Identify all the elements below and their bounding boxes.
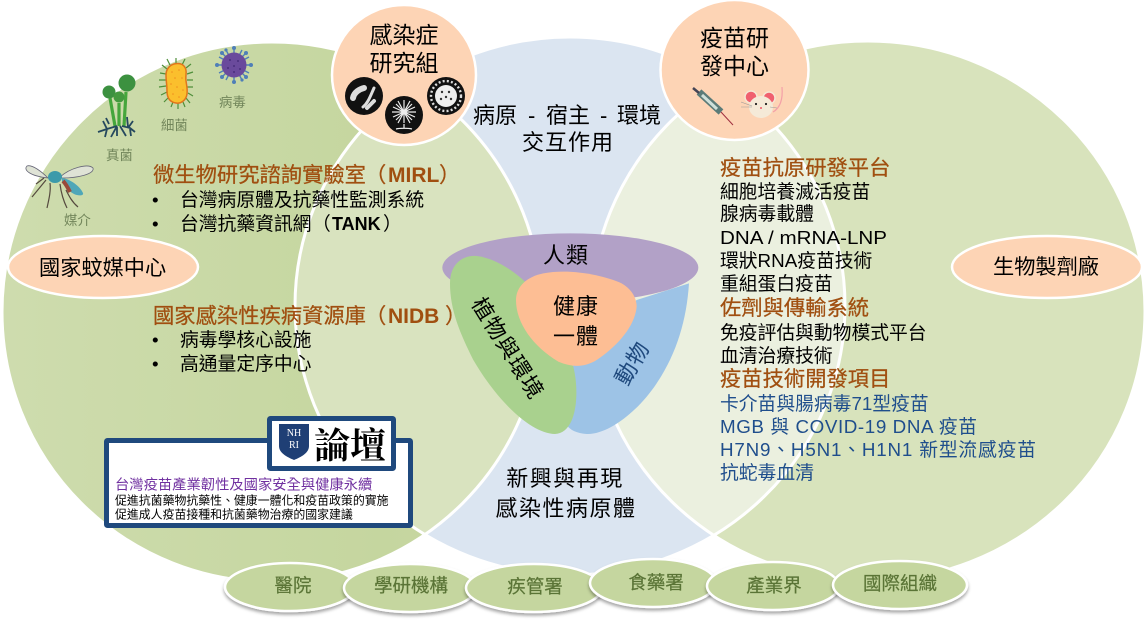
pill: CDC: 疾管署 <box>507 576 563 597</box>
list: adjuvants: 免疫評估與動物模式平台 <box>720 322 927 343</box>
pill: FDA: 食藥署 <box>628 572 684 593</box>
text block: vaccine platforms <box>720 156 1036 483</box>
text: pathogen host environment: 環境 <box>617 103 661 128</box>
list: adjuvants: 血清治療技術 <box>720 345 833 366</box>
logo: NHRI forum <box>270 418 394 468</box>
list: adjuvants <box>720 322 927 366</box>
badge: infectious disease research group: 感染症 <box>370 22 438 48</box>
overlap: center and right <box>604 117 844 534</box>
diagram: One Health <box>442 233 698 434</box>
text: pathogen host environment: - <box>600 103 607 128</box>
text: emerging pathogens: 新興與再現 <box>506 466 624 491</box>
list: antigen platforms: 腺病毒載體 <box>720 203 814 224</box>
logo: NHRI forum: RI <box>289 440 299 451</box>
bullet: Taiwan pathogen surveillance: • <box>152 189 159 210</box>
list: vaccine projects: 抗蛇毒血清 <box>720 462 814 483</box>
badge: infectious disease research group <box>332 5 476 145</box>
icon: syringe <box>693 88 733 125</box>
text: pathogen host environment: 交互作用 <box>522 130 614 155</box>
label: humans: 人類 <box>543 243 589 268</box>
icon: mouse <box>741 87 782 118</box>
overlap: left and center <box>296 120 530 533</box>
text: pathogen host environment: - <box>528 103 535 128</box>
pill: international organizations <box>833 561 967 609</box>
list: antigen platforms: DNA / mRNA-LNP <box>720 227 887 248</box>
icon: virus <box>215 46 253 84</box>
heading: adjuvants: 佐劑與傳輸系統 <box>720 296 869 320</box>
icon: fungus <box>98 74 136 137</box>
bullet: sequencing center: • <box>152 353 159 374</box>
bullet: TANK: ） <box>383 213 402 234</box>
list: vaccine projects: H7N9、H5N1、H1N1 新型流感疫苗 <box>720 439 1036 460</box>
pill: hospitals: 醫院 <box>274 575 312 596</box>
list: antigen platforms: 環狀RNA疫苗技術 <box>720 250 873 271</box>
bullet: TANK: 台灣抗藥資訊網 <box>180 213 311 234</box>
bullet: Taiwan pathogen surveillance: 台灣病原體及抗藥性監測系統 <box>180 189 424 210</box>
heading: MIRL: （ <box>365 163 386 187</box>
list: antigen platforms: 細胞培養滅活疫苗 <box>720 181 870 202</box>
list: vaccine projects <box>720 393 1036 483</box>
text block: MIRL <box>152 163 460 234</box>
pill: industry <box>707 562 839 610</box>
bullet: TANK: （ <box>312 213 331 234</box>
list: antigen platforms <box>720 181 887 294</box>
pill: academia <box>344 564 476 612</box>
heading: MIRL: 微生物研究諮詢實驗室 <box>153 163 366 187</box>
text: emerging pathogens <box>495 466 637 521</box>
logo: NHRI forum: 論壇 <box>314 426 386 466</box>
icon: fungus spore <box>385 96 423 134</box>
heading: vaccine projects: 疫苗技術開發項目 <box>720 367 890 391</box>
label: animals: 動物 <box>610 337 655 389</box>
heading: antigen platform: 疫苗抗原研發平台 <box>720 156 890 180</box>
segment: humans <box>442 233 698 302</box>
label: one health: 健康 <box>553 294 599 319</box>
label: vector: 媒介 <box>64 213 91 228</box>
heading: MIRL: MIRL <box>388 164 439 187</box>
pill: hospitals <box>225 563 355 611</box>
badge: infectious disease research group: 研究組 <box>370 50 438 76</box>
heading: NIDB: NIDB <box>388 305 439 328</box>
icon: coronavirus <box>427 77 465 115</box>
segment: one health core <box>516 272 637 366</box>
circle: center pathogens <box>295 37 845 575</box>
heading: NIDB: 國家感染性疾病資源庫 <box>153 304 366 328</box>
icon: bacilli <box>345 77 383 115</box>
label: bacterium: 細菌 <box>161 118 188 133</box>
heading: NIDB: ） <box>445 304 466 328</box>
badge: vaccine development center <box>660 0 808 140</box>
bullet: virology core: • <box>152 329 159 350</box>
bullet: sequencing center: 高通量定序中心 <box>180 353 312 374</box>
circle: right vaccine <box>591 41 1145 581</box>
list: vaccine projects: MGB 與 COVID-19 DNA 疫苗 <box>720 416 977 437</box>
heading: MIRL: ） <box>439 163 460 187</box>
heading: NIDB: （ <box>365 304 386 328</box>
pill: biologics plant <box>952 236 1142 298</box>
badge: vaccine development center: 疫苗研 <box>700 25 769 51</box>
logo: NHRI forum: NH <box>287 428 301 439</box>
text: pathogen host environment <box>473 103 661 155</box>
pill: industry: 產業界 <box>746 575 802 596</box>
badge: vaccine development center: 發中心 <box>700 53 769 79</box>
bullet: TANK: TANK <box>332 214 381 234</box>
pill: FDA <box>590 559 716 607</box>
pill: CDC <box>466 564 602 612</box>
list: antigen platforms: 重組蛋白疫苗 <box>720 273 833 294</box>
text: pathogen host environment: 病原 <box>473 103 517 128</box>
label: virus: 病毒 <box>219 95 246 110</box>
pill: international organizations: 國際組織 <box>863 573 937 594</box>
text: forum line two: 促進成人疫苗接種和抗菌藥物治療的國家建議 <box>115 508 353 522</box>
stakeholder pills <box>225 559 967 612</box>
text: forum title: 台灣疫苗產業韌性及國家安全與健康永續 <box>115 476 372 494</box>
label: plants and environment: 植物與環境 <box>467 293 549 404</box>
icon: bacterium <box>159 58 193 109</box>
callout: NHRI forum <box>106 418 410 526</box>
label: one health line two: 一體 <box>553 324 599 349</box>
bullet: TANK: • <box>152 213 159 234</box>
text block: NIDB <box>152 304 466 374</box>
icon: mosquito <box>26 166 93 208</box>
pill: biologics plant: 生物製劑廠 <box>993 255 1099 279</box>
segment: plants and environment <box>450 256 576 434</box>
bullet: virology core: 病毒學核心設施 <box>180 329 312 350</box>
circle: left microbial <box>2 42 542 582</box>
text: pathogen host environment: 宿主 <box>546 103 590 128</box>
pill: national mosquito vector center <box>8 236 198 298</box>
label: fungus: 真菌 <box>106 148 133 163</box>
pill: national mosquito vector center: 國家蚊媒中心 <box>39 256 166 280</box>
segment: animals <box>567 283 689 434</box>
text: emerging pathogens: 感染性病原體 <box>495 496 637 521</box>
list: vaccine projects: 卡介苗與腸病毒71型疫苗 <box>720 393 929 414</box>
pill: academia: 學研機構 <box>374 575 448 596</box>
text: forum line one: 促進抗菌藥物抗藥性、健康一體化和疫苗政策的實施 <box>115 494 389 508</box>
